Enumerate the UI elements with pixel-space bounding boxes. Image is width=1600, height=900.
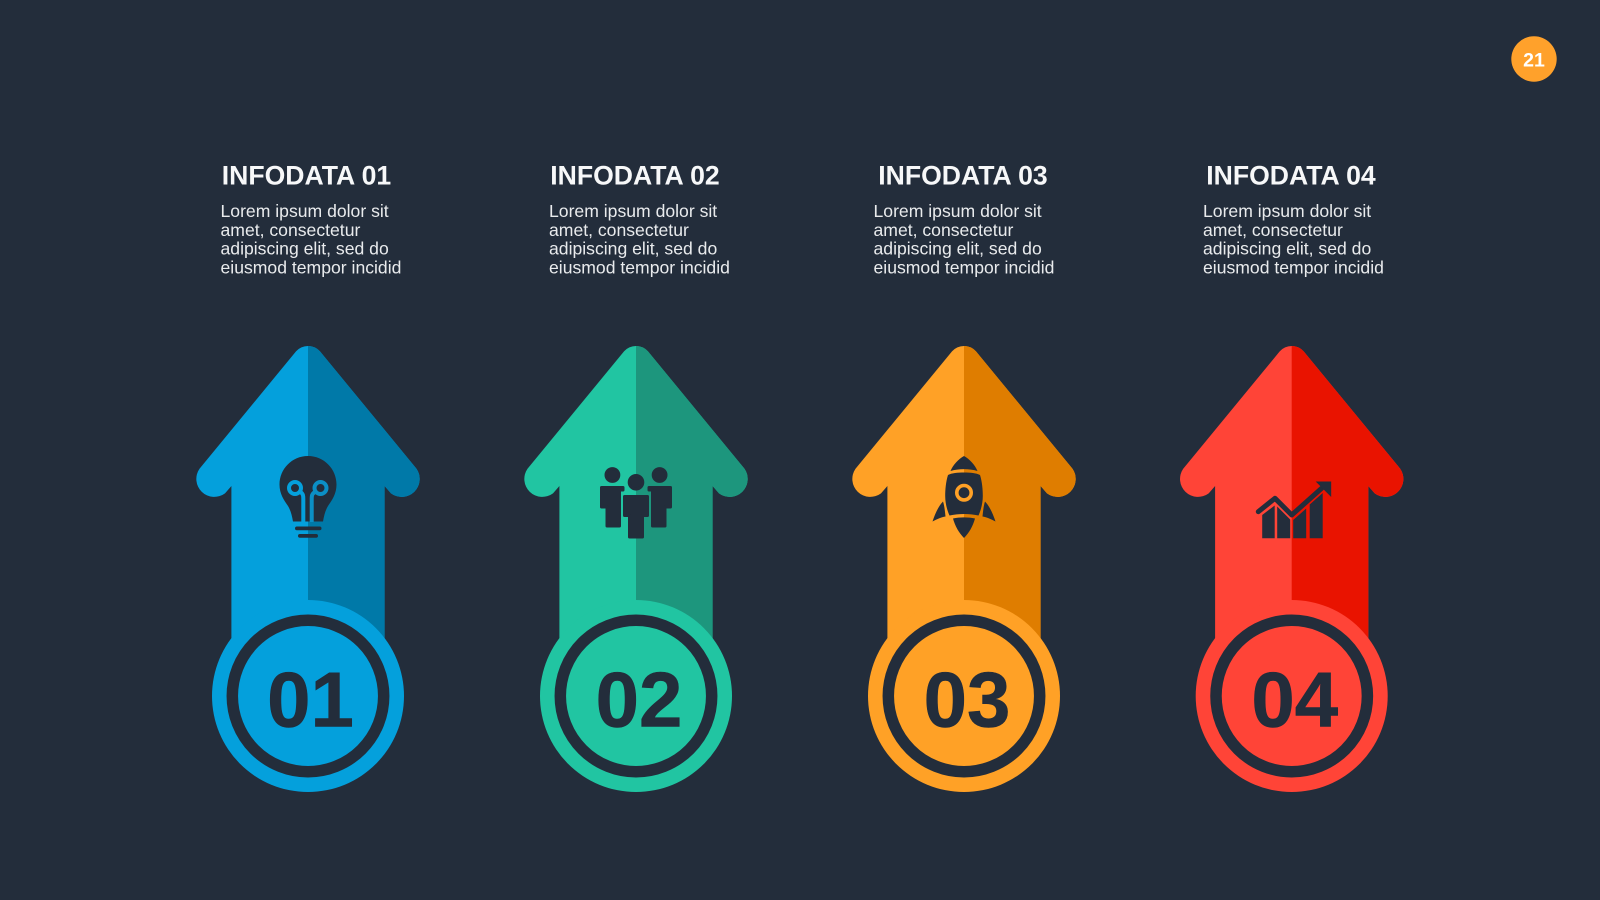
- arrow 03: [852, 346, 1076, 650]
- heading 02: INFODATA 02: [550, 160, 720, 190]
- number badge 02: [540, 600, 732, 792]
- text block 03: [874, 201, 1054, 277]
- icon: rising chart: [1258, 482, 1331, 538]
- text block 03: adipiscing elit, sed do: [874, 239, 1042, 259]
- heading 03: INFODATA 03: [878, 160, 1048, 190]
- text block 02: Lorem ipsum dolor sit: [549, 201, 717, 221]
- icon: light bulb: [280, 456, 336, 538]
- number badge 01: [212, 600, 404, 792]
- text block 02: [549, 201, 730, 277]
- panel: infodata 02: [524, 160, 748, 792]
- arrow 04: [1180, 346, 1403, 650]
- text block 01: eiusmod tempor incidid: [220, 257, 401, 277]
- panel: infodata 04: [1180, 160, 1403, 792]
- text block 01: Lorem ipsum dolor sit: [220, 201, 389, 221]
- icon: rocket: [932, 456, 996, 538]
- number badge 03: [868, 600, 1060, 792]
- page number badge: 21: [1523, 50, 1545, 72]
- page number badge: [1511, 36, 1557, 82]
- number badge 02: 02: [596, 656, 682, 744]
- number badge 04: [1196, 600, 1388, 792]
- heading 04: INFODATA 04: [1206, 160, 1376, 190]
- icon: team of people: [602, 469, 670, 537]
- number badge 01: 01: [267, 656, 354, 744]
- number badge 03: 03: [924, 656, 1010, 744]
- text block 02: eiusmod tempor incidid: [549, 257, 730, 277]
- text block 01: amet, consectetur: [220, 220, 360, 240]
- text block 03: eiusmod tempor incidid: [874, 257, 1054, 277]
- text block 04: adipiscing elit, sed do: [1203, 239, 1371, 259]
- text block 04: eiusmod tempor incidid: [1203, 257, 1384, 277]
- text block 04: Lorem ipsum dolor sit: [1203, 201, 1371, 221]
- panel: infodata 01: [196, 160, 420, 792]
- text block 02: amet, consectetur: [549, 220, 689, 240]
- text block 04: amet, consectetur: [1203, 220, 1343, 240]
- arrow 01: [196, 346, 420, 650]
- text block 03: amet, consectetur: [874, 220, 1013, 240]
- text block 02: adipiscing elit, sed do: [549, 239, 717, 259]
- text block 01: adipiscing elit, sed do: [220, 239, 389, 259]
- text block 03: Lorem ipsum dolor sit: [874, 201, 1042, 221]
- text block 04: [1203, 201, 1384, 277]
- panel: infodata 03: [852, 160, 1076, 792]
- arrow 02: [524, 346, 748, 650]
- heading 01: INFODATA 01: [222, 160, 391, 190]
- number badge 04: 04: [1251, 656, 1338, 744]
- text block 01: [220, 201, 401, 277]
